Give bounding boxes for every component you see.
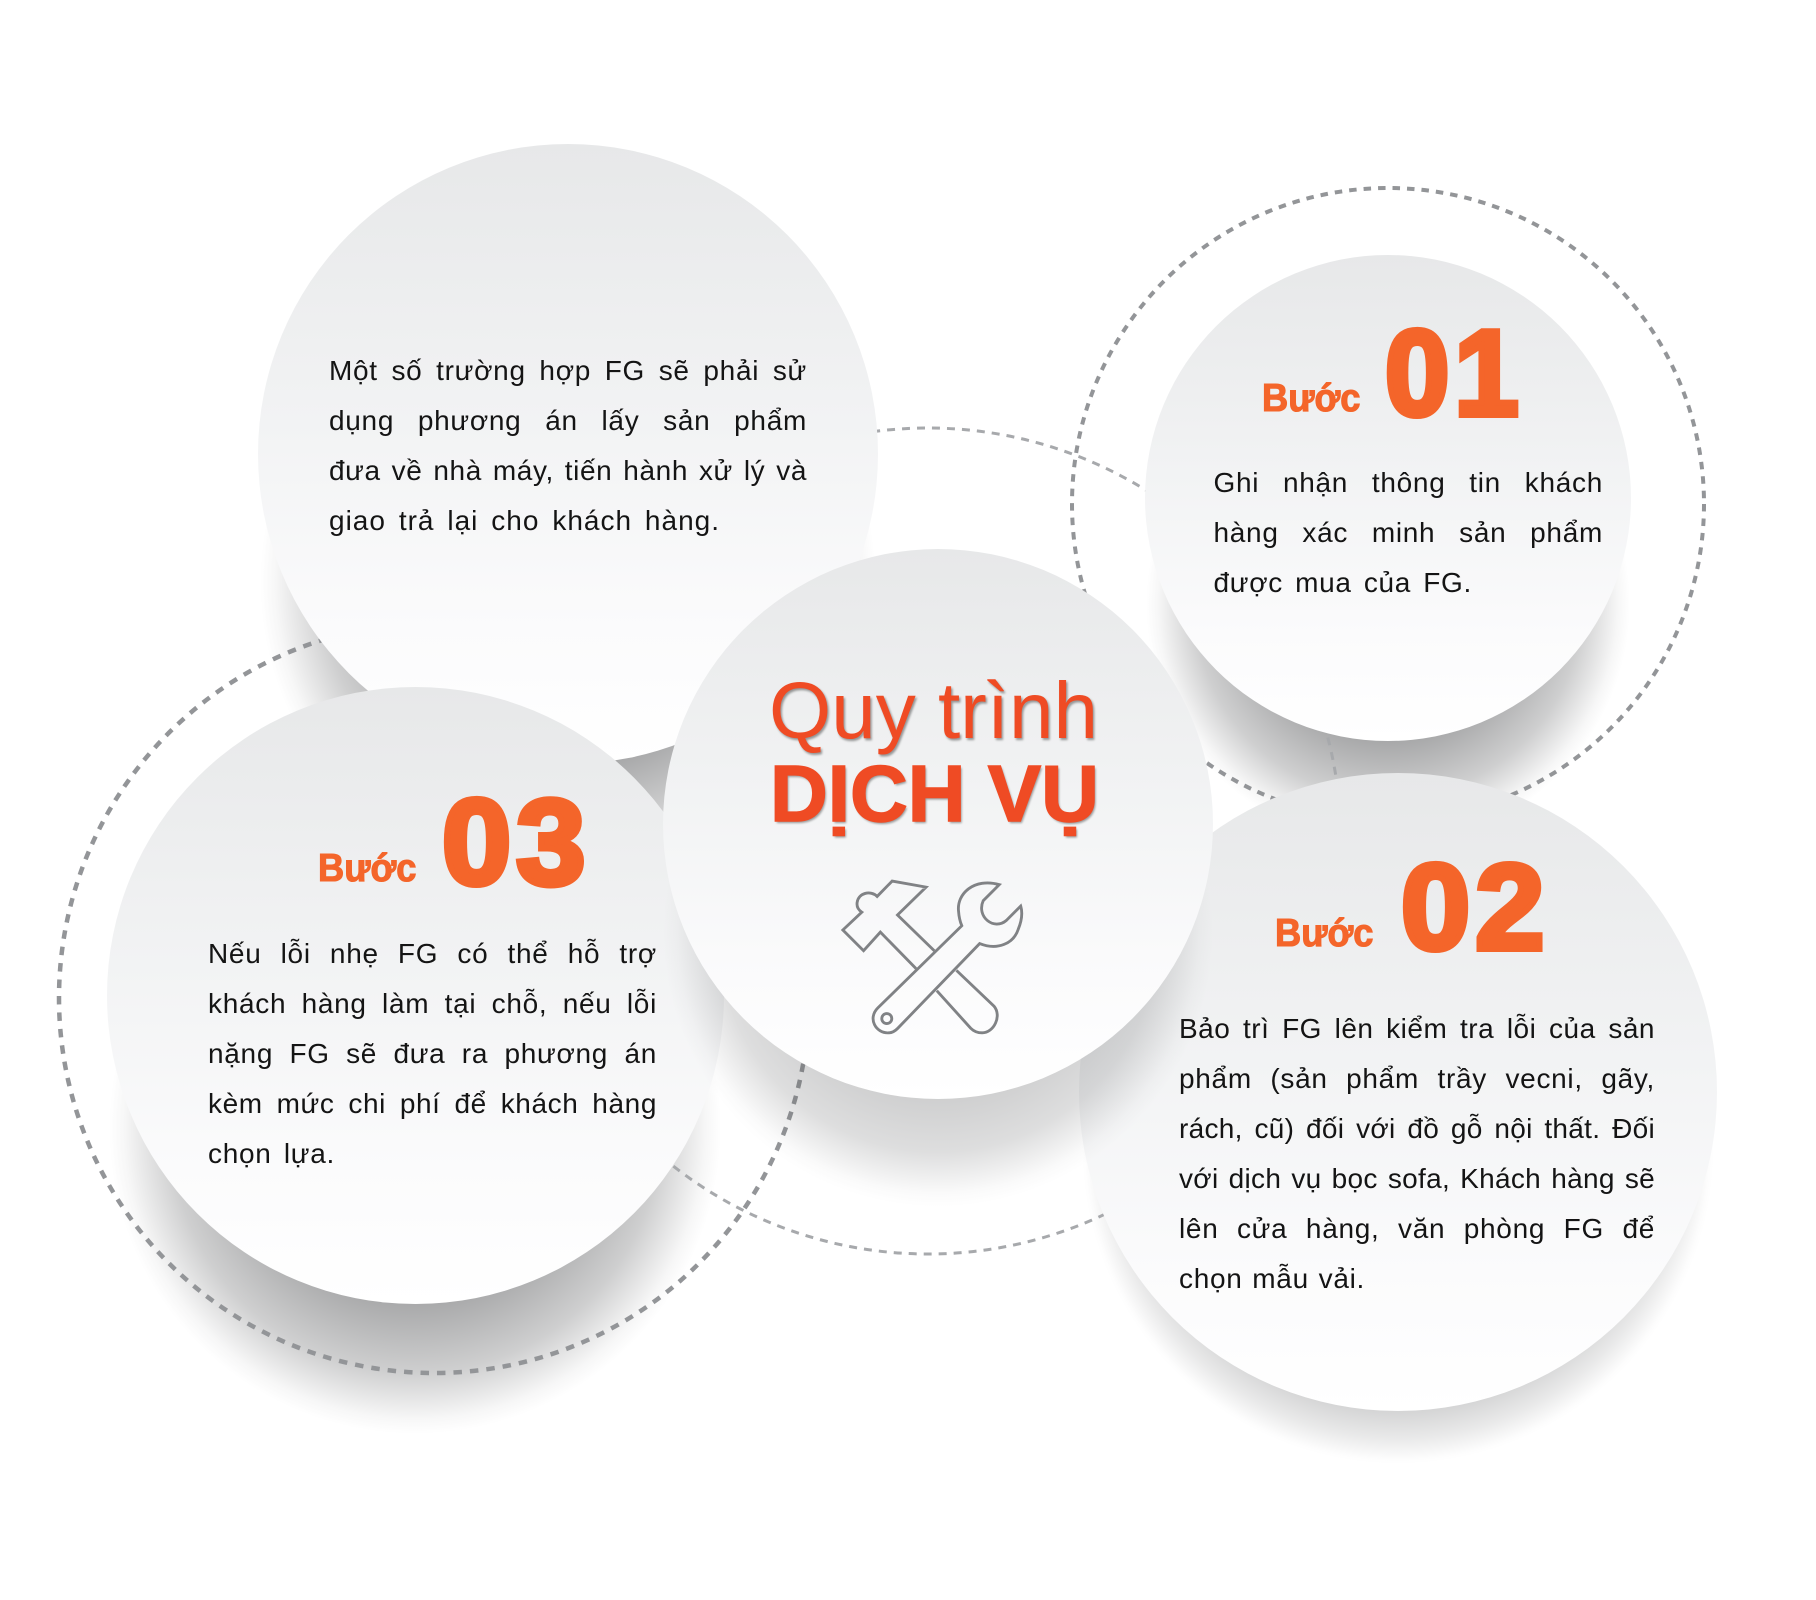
hammer lower handle — [937, 970, 997, 1033]
text: step 2 line 6: chọn mẫu vải. — [1179, 1263, 1365, 1294]
panel: centre title circle — [663, 549, 1213, 1099]
text: step 1 line 2: hàng xác minh sản phẩm — [1214, 517, 1603, 548]
text: step 3 line 4: kèm mức chi phí để khách hàng — [208, 1088, 657, 1119]
wrench hole — [882, 1014, 892, 1024]
panel: step 2 — [1079, 773, 1717, 1411]
text: step 2 line 3: rách, cũ) đối với đồ gỗ nội thất. Đối — [1179, 1113, 1655, 1144]
number: 02: 02 — [1400, 839, 1549, 975]
panel: step 1 — [1145, 255, 1631, 741]
text: step 3 line 5: chọn lựa. — [208, 1138, 335, 1169]
hammer head and upper handle — [843, 881, 934, 969]
text: step 1 line 1: Ghi nhận thông tin khách — [1214, 467, 1603, 498]
text: intro line 2: dụng phương án lấy sản phẩm — [329, 405, 807, 436]
number: 01: 01 — [1385, 305, 1523, 441]
text: step 3 line 2: khách hàng làm tại chỗ, nếu lỗi — [208, 988, 657, 1019]
step 3 dashed ring — [59, 623, 809, 1373]
shadow: step 3 circle — [109, 822, 721, 1434]
text: intro line 4: giao trả lại cho khách hàng. — [329, 505, 720, 536]
step 1 dashed ring — [1072, 188, 1704, 820]
label: Bước: Bước — [318, 847, 416, 890]
text: intro line 3: đưa về nhà máy, tiến hành xử lý và — [329, 455, 807, 486]
text: step 2 line 4: với dịch vụ bọc sofa, Khách hàng sẽ — [1179, 1163, 1655, 1194]
number: 03: 03 — [442, 774, 591, 910]
text: step 3 line 3: nặng FG sẽ đưa ra phương án — [208, 1038, 657, 1069]
shadow: top-left circle — [260, 274, 876, 890]
text: step 2 line 5: lên cửa hàng, văn phòng FG để — [1179, 1213, 1655, 1244]
label: Bước: Bước — [1275, 912, 1373, 955]
text: intro line 1: Một số trường hợp FG sẽ phải sử — [329, 355, 807, 386]
text: step 2 line 2: phẩm (sản phẩm trầy vecni, gãy, — [1179, 1063, 1655, 1094]
panel: intro circle — [258, 144, 878, 764]
shadow: step 1 circle — [1146, 362, 1630, 846]
text: step 1 line 3: được mua của FG. — [1214, 567, 1472, 598]
panel: step 3 — [106, 687, 724, 1304]
heading: DỊCH VỤ: DỊCH VỤ — [770, 749, 1099, 838]
icon: hammer and wrench — [841, 880, 1024, 1034]
label: Bước: Bước — [1262, 377, 1360, 420]
heading: Quy trình: Quy trình — [769, 666, 1098, 755]
text: step 2 line 1: Bảo trì FG lên kiểm tra lỗi của sản — [1179, 1013, 1655, 1044]
wrench outline — [873, 883, 1022, 1033]
shadow: step 2 circle — [1082, 832, 1714, 1464]
connector dashed ring — [515, 428, 1341, 1254]
text: step 3 line 1: Nếu lỗi nhẹ FG có thể hỗ trợ — [208, 938, 657, 969]
